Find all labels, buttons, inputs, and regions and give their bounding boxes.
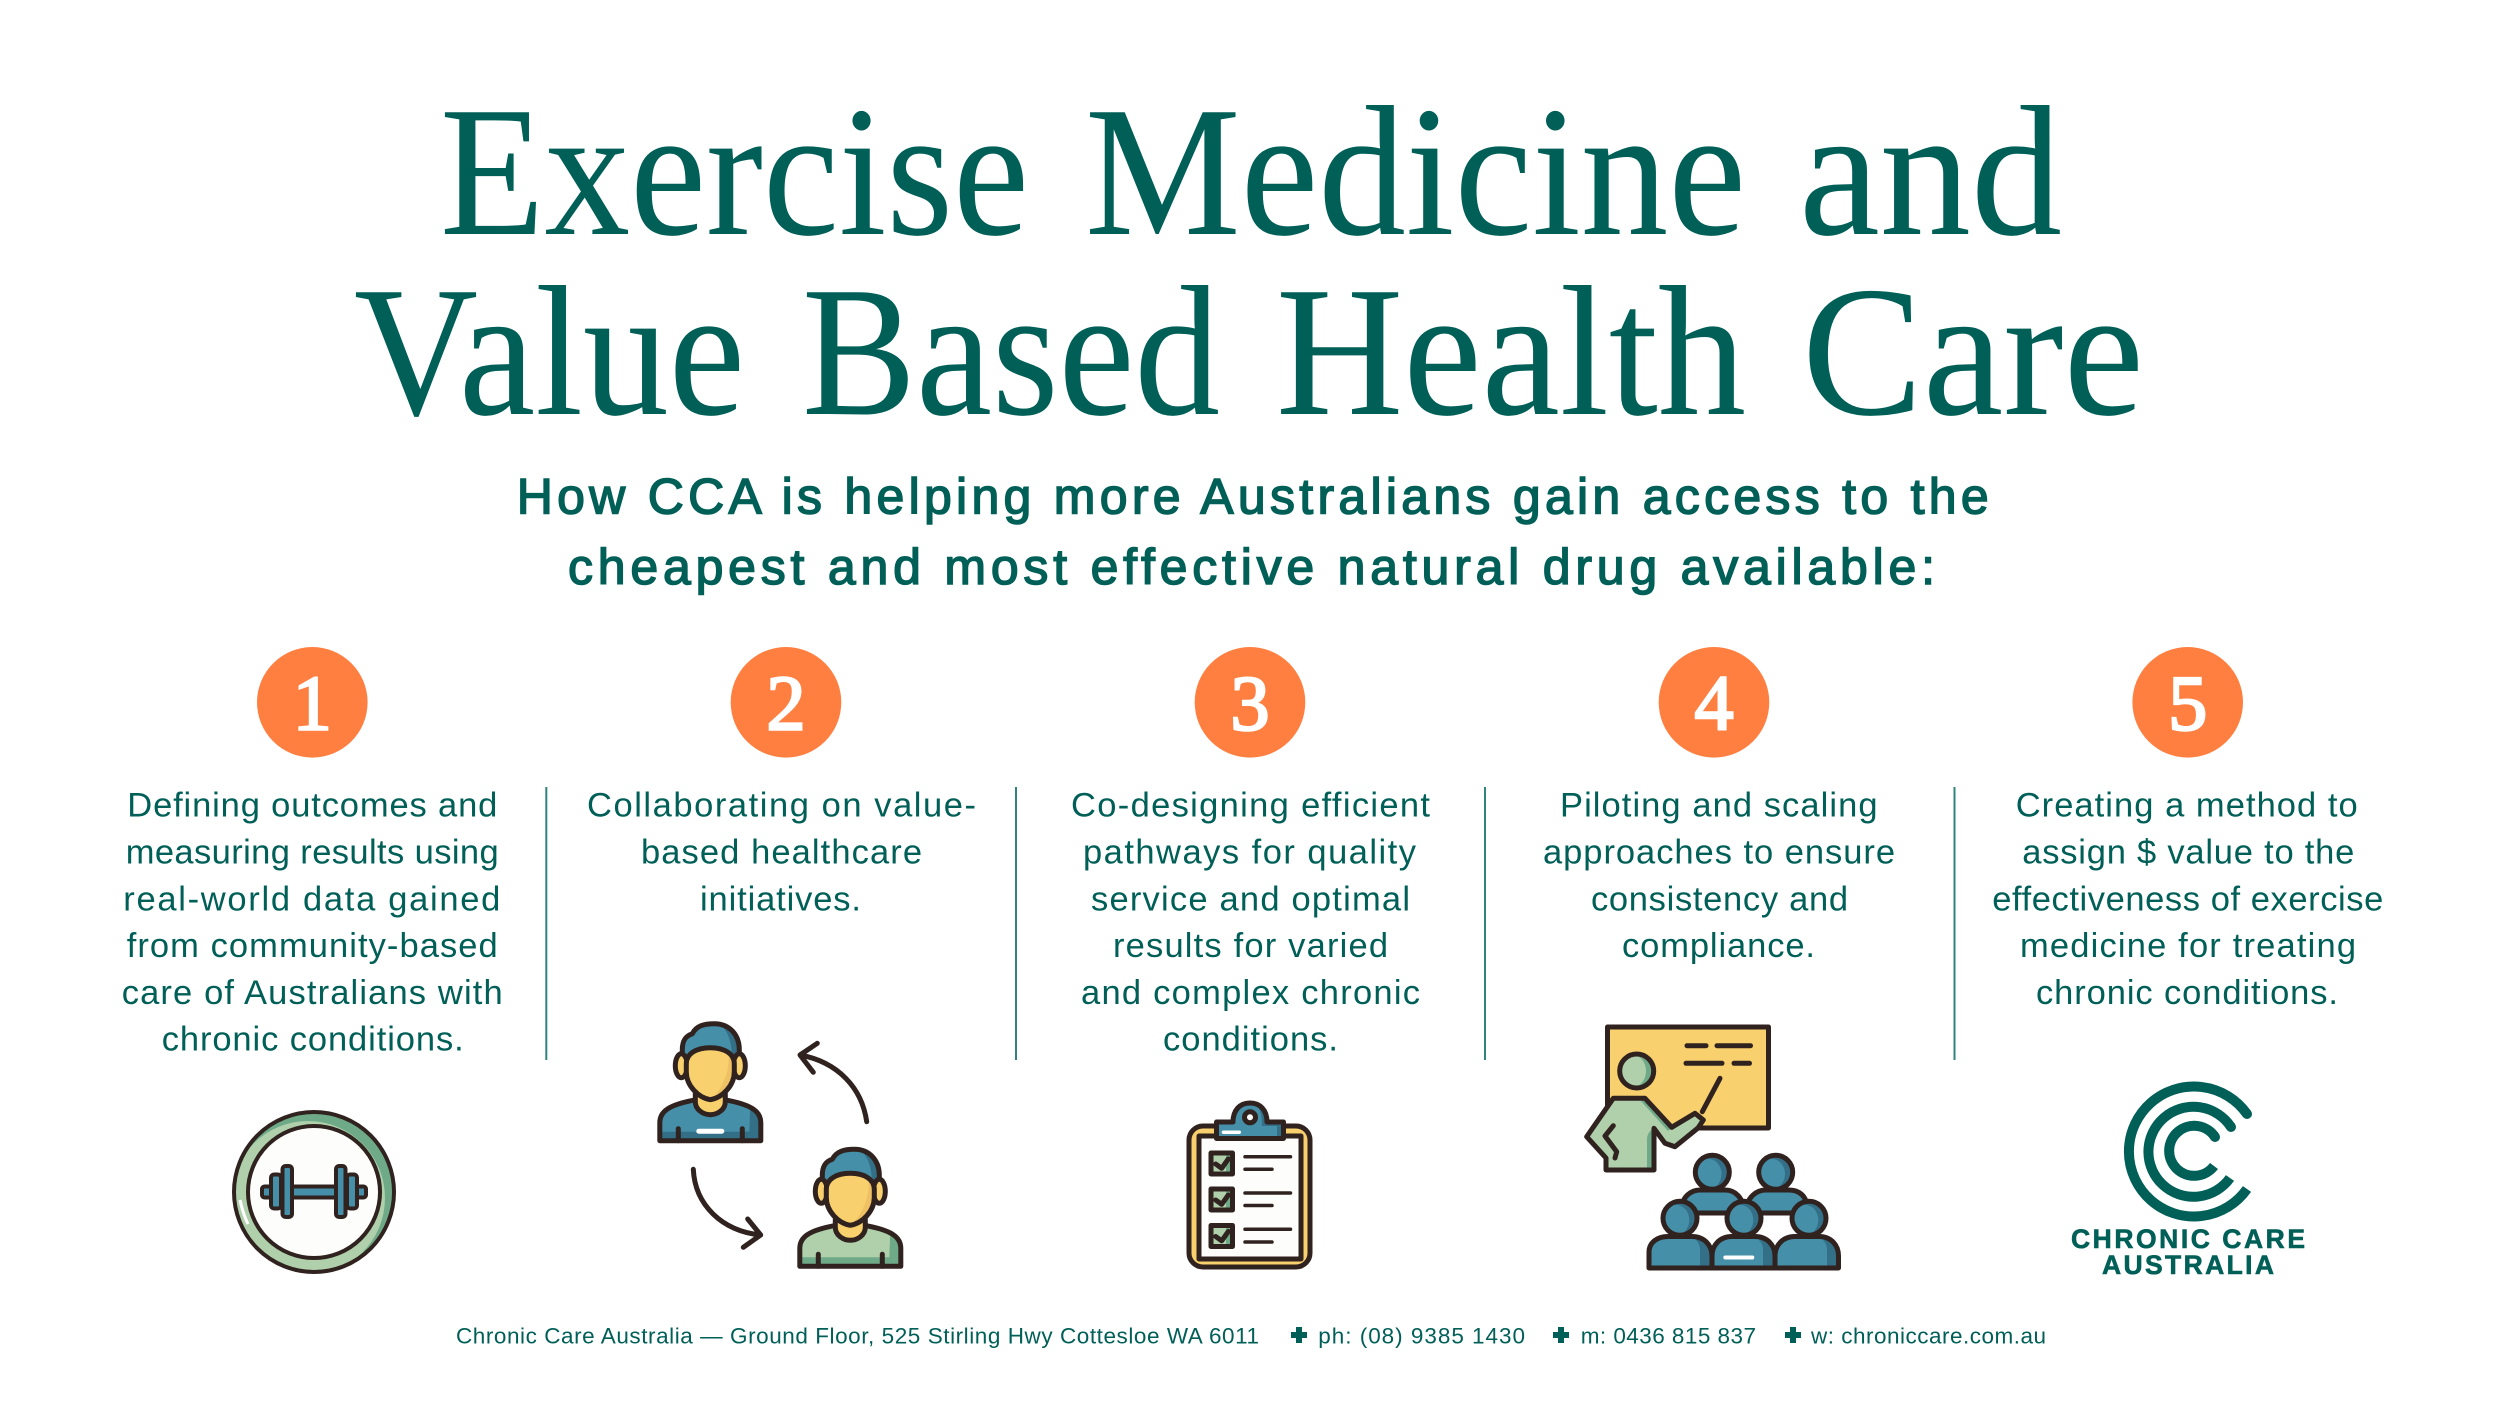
icon: dumbbell in ring (231, 1112, 394, 1275)
footer contact line: ph: (08) 9385 1430 (1318, 1323, 1525, 1348)
footer contact line: m: 0436 815 837 (1581, 1323, 1756, 1348)
text block: step 1: care of Australians with (122, 974, 503, 1012)
text block: step 1: real-world data gained (123, 880, 500, 918)
text block: step 3 (1071, 787, 1430, 1059)
footer contact line: w: chroniccare.com.au (1810, 1323, 2046, 1348)
footer contact line: Chronic Care Australia — Ground Floor, 525 Stirling Hwy Cottesloe WA 6011 (456, 1323, 1259, 1348)
text block: step 3: Co-designing efficient (1071, 787, 1430, 825)
title: Medicine (1085, 69, 1746, 275)
number badge 5: 5 (2168, 659, 2207, 746)
title: Health (1276, 249, 1746, 455)
text block: step 3: and complex chronic (1081, 974, 1420, 1012)
text block: step 1: measuring results using (126, 834, 499, 872)
icon: cross (1291, 1327, 1307, 1343)
text block: step 1 (122, 787, 503, 1059)
text block: step 2: based healthcare (641, 834, 922, 872)
number badge 4: 4 (1694, 659, 1734, 746)
title: Exercise (440, 69, 1029, 275)
text block: step 1: chronic conditions. (162, 1021, 464, 1059)
title: Value (354, 249, 745, 455)
text block: step 5: chronic conditions. (2036, 974, 2338, 1012)
icon: presenter and audience (1587, 1027, 1838, 1268)
icon: cross (1553, 1327, 1569, 1343)
number badge 3: 3 (1230, 659, 1270, 746)
text block: step 3: service and optimal (1091, 880, 1410, 918)
text block: step 5: effectiveness of exercise (1992, 880, 2383, 918)
text block: step 2 (587, 787, 976, 918)
person: green shirt (800, 1149, 901, 1266)
arrow: up-left (800, 1043, 867, 1122)
number badge 1 (257, 647, 368, 758)
icon: clipboard checklist (1189, 1103, 1310, 1267)
number badge 2 (731, 647, 841, 758)
checklist row 3 (1211, 1226, 1290, 1246)
text block: step 5 (1992, 787, 2383, 1012)
logo: Chronic Care Australia: AUSTRALIA (2102, 1250, 2274, 1280)
text block: step 3: pathways for quality (1083, 834, 1417, 872)
text block: step 5: medicine for treating (2020, 927, 2356, 965)
text block: step 3: results for varied (1113, 927, 1388, 965)
text block: step 4 (1543, 787, 1895, 965)
checklist row 1 (1211, 1153, 1290, 1174)
title (354, 69, 2144, 455)
presenter (1587, 1054, 1703, 1170)
person: teal shirt (660, 1024, 761, 1141)
audience back row (1682, 1155, 1807, 1213)
text block: step 4: consistency and (1591, 880, 1848, 918)
text block: step 2: Collaborating on value- (587, 787, 976, 825)
subtitle: How CCA is helping more Australians gain access to the (517, 468, 1989, 524)
icon: cross (1785, 1327, 1801, 1343)
number badge 3 (1195, 647, 1305, 758)
text block: step 2: initiatives. (700, 880, 861, 918)
logo: Chronic Care Australia: CHRONIC CARE (2071, 1224, 2305, 1254)
footer contact line (456, 1323, 2046, 1348)
text block: step 5: assign $ value to the (2022, 834, 2354, 872)
audience front row (1649, 1201, 1838, 1268)
checklist row 2 (1211, 1189, 1290, 1210)
text block: step 5: Creating a method to (2016, 787, 2358, 825)
subtitle (517, 468, 1989, 595)
text block: step 1: from community-based (127, 927, 498, 965)
title: Care (1802, 249, 2144, 455)
title: and (1799, 69, 2062, 275)
text block: step 3: conditions. (1163, 1021, 1338, 1059)
title: Based (802, 249, 1220, 455)
text block: step 4: Piloting and scaling (1560, 787, 1878, 825)
text block: step 4: compliance. (1622, 927, 1815, 965)
arrow: down-right (693, 1169, 761, 1247)
number badge 4 (1659, 647, 1769, 758)
number badge 5 (2132, 647, 2243, 758)
text block: step 4: approaches to ensure (1543, 834, 1895, 872)
icon: two people exchanging (660, 1024, 901, 1266)
subtitle: cheapest and most effective natural drug available: (568, 539, 1935, 595)
text block: step 1: Defining outcomes and (127, 787, 497, 825)
presentation board (1608, 1027, 1768, 1128)
number badge 1: 1 (293, 659, 332, 746)
logo: Chronic Care Australia (2071, 1087, 2305, 1280)
number badge 2: 2 (766, 659, 806, 746)
